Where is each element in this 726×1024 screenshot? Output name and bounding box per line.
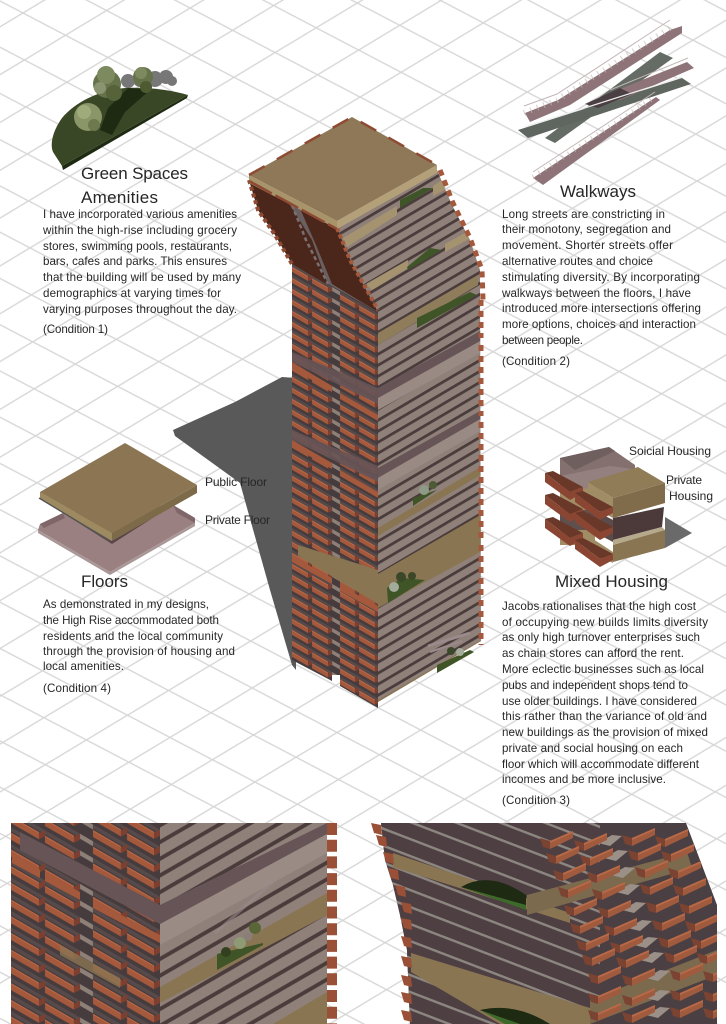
text block: walkways: Long streets are constricting in [502, 208, 665, 221]
text block: mixed housing: floor which will accommodate different [502, 758, 700, 771]
text block: mixed housing: of occupying new builds limits diversity [502, 616, 708, 629]
text block: walkways: between people. [502, 334, 583, 347]
text block: amenities: I have incorporated various amenities [43, 208, 237, 221]
text block: walkways [501, 208, 701, 368]
text block: walkways: alternative routes and choice [502, 255, 653, 268]
text block: mixed housing: as only high turnover enterprises such [502, 631, 700, 644]
text block: walkways: stimulating diversity. By incorporating [502, 271, 700, 284]
tower right face with floor stripes [338, 170, 481, 702]
text block: amenities: demographics at varying times for [43, 287, 221, 300]
text block: floors [43, 598, 235, 695]
text block: amenities: (Condition 1) [43, 323, 108, 336]
text block: mixed housing: incomes and be more inclusive. [502, 773, 666, 786]
text block: amenities: that the building will be used by many [43, 271, 241, 284]
heading: green spaces: Green Spaces [81, 164, 188, 183]
text block: floors: through the provision of housing and [43, 645, 235, 658]
text block: mixed housing: private and social housing on each [502, 742, 683, 755]
heading: amenities: Amenities [81, 188, 158, 207]
text block: mixed housing: new buildings as the provision of mixed [502, 726, 708, 739]
balcony rows [540, 828, 726, 1023]
text block: amenities: stores, swimming pools, restaurants, [43, 240, 232, 253]
label: private housing: Housing [669, 489, 713, 503]
tower left face with balconies [292, 264, 378, 708]
text block: floors: As demonstrated in my designs, [43, 598, 209, 611]
text block: floors: the High Rise accommodated both [43, 614, 219, 627]
text block: mixed housing: as chain stores can afford the rent. [502, 647, 684, 660]
icon: green space half-disc with trees [52, 66, 188, 170]
public floor plate [40, 485, 197, 541]
green terraces on tower [387, 188, 477, 673]
text block: amenities: within the high-rise including grocery [42, 224, 237, 237]
panel: bottom left close-up of tower [11, 823, 332, 1024]
text block: walkways: more options, choices and interaction [502, 318, 696, 331]
label: private housing [666, 473, 713, 503]
text block: amenities: varying purposes throughout the day. [43, 303, 237, 316]
heading: mixed housing: Mixed Housing [555, 572, 668, 591]
icon: walkways [518, 20, 694, 185]
tower roof slab [249, 117, 437, 229]
heading: walkways: Walkways [560, 182, 636, 201]
text block: mixed housing: (Condition 3) [502, 794, 570, 807]
diagram: floors [38, 443, 197, 575]
tower right edge balcony teeth [440, 170, 483, 645]
text block: mixed housing: pubs and independent shops tend to [502, 679, 688, 692]
text block: walkways: introduced more intersections offering [502, 302, 701, 315]
text block: amenities [42, 208, 241, 336]
diagram: mixed housing [545, 447, 692, 567]
text block: walkways: their monotony, segregation and [502, 223, 671, 236]
heading: floors: Floors [81, 572, 128, 591]
text block: mixed housing: use older buildings. I have considered [502, 695, 697, 708]
text block: floors: residents and the local community [43, 630, 223, 643]
text block: walkways: walkways between the floors, I have [501, 287, 691, 300]
text block: walkways: (Condition 2) [502, 355, 570, 368]
text block: floors: (Condition 4) [43, 682, 111, 695]
label: private housing: Private [666, 473, 702, 487]
balcony teeth on left edge [371, 823, 412, 1022]
text block: amenities: bars, cafes and parks. This ensures [43, 255, 227, 268]
text block: walkways: movement. Shorter streets offer [502, 239, 673, 252]
text block: mixed housing: Jacobs rationalises that the high cost [502, 600, 697, 613]
panel: bottom right close-up of tower [371, 823, 726, 1024]
text block: floors: local amenities. [43, 660, 124, 673]
label: private floor: Private Floor [205, 513, 270, 527]
tower: main building [249, 117, 490, 720]
label: social housing: Soicial Housing [629, 444, 711, 458]
tower shadow [173, 377, 296, 670]
private floor plate [38, 505, 195, 572]
tower curved underside [249, 180, 378, 312]
label: public floor: Public Floor [205, 475, 267, 489]
text block: mixed housing: this rather than the variance of old and [502, 710, 707, 723]
text block: mixed housing [502, 600, 708, 807]
text block: mixed housing: More eclectic businesses such as local [502, 663, 704, 676]
